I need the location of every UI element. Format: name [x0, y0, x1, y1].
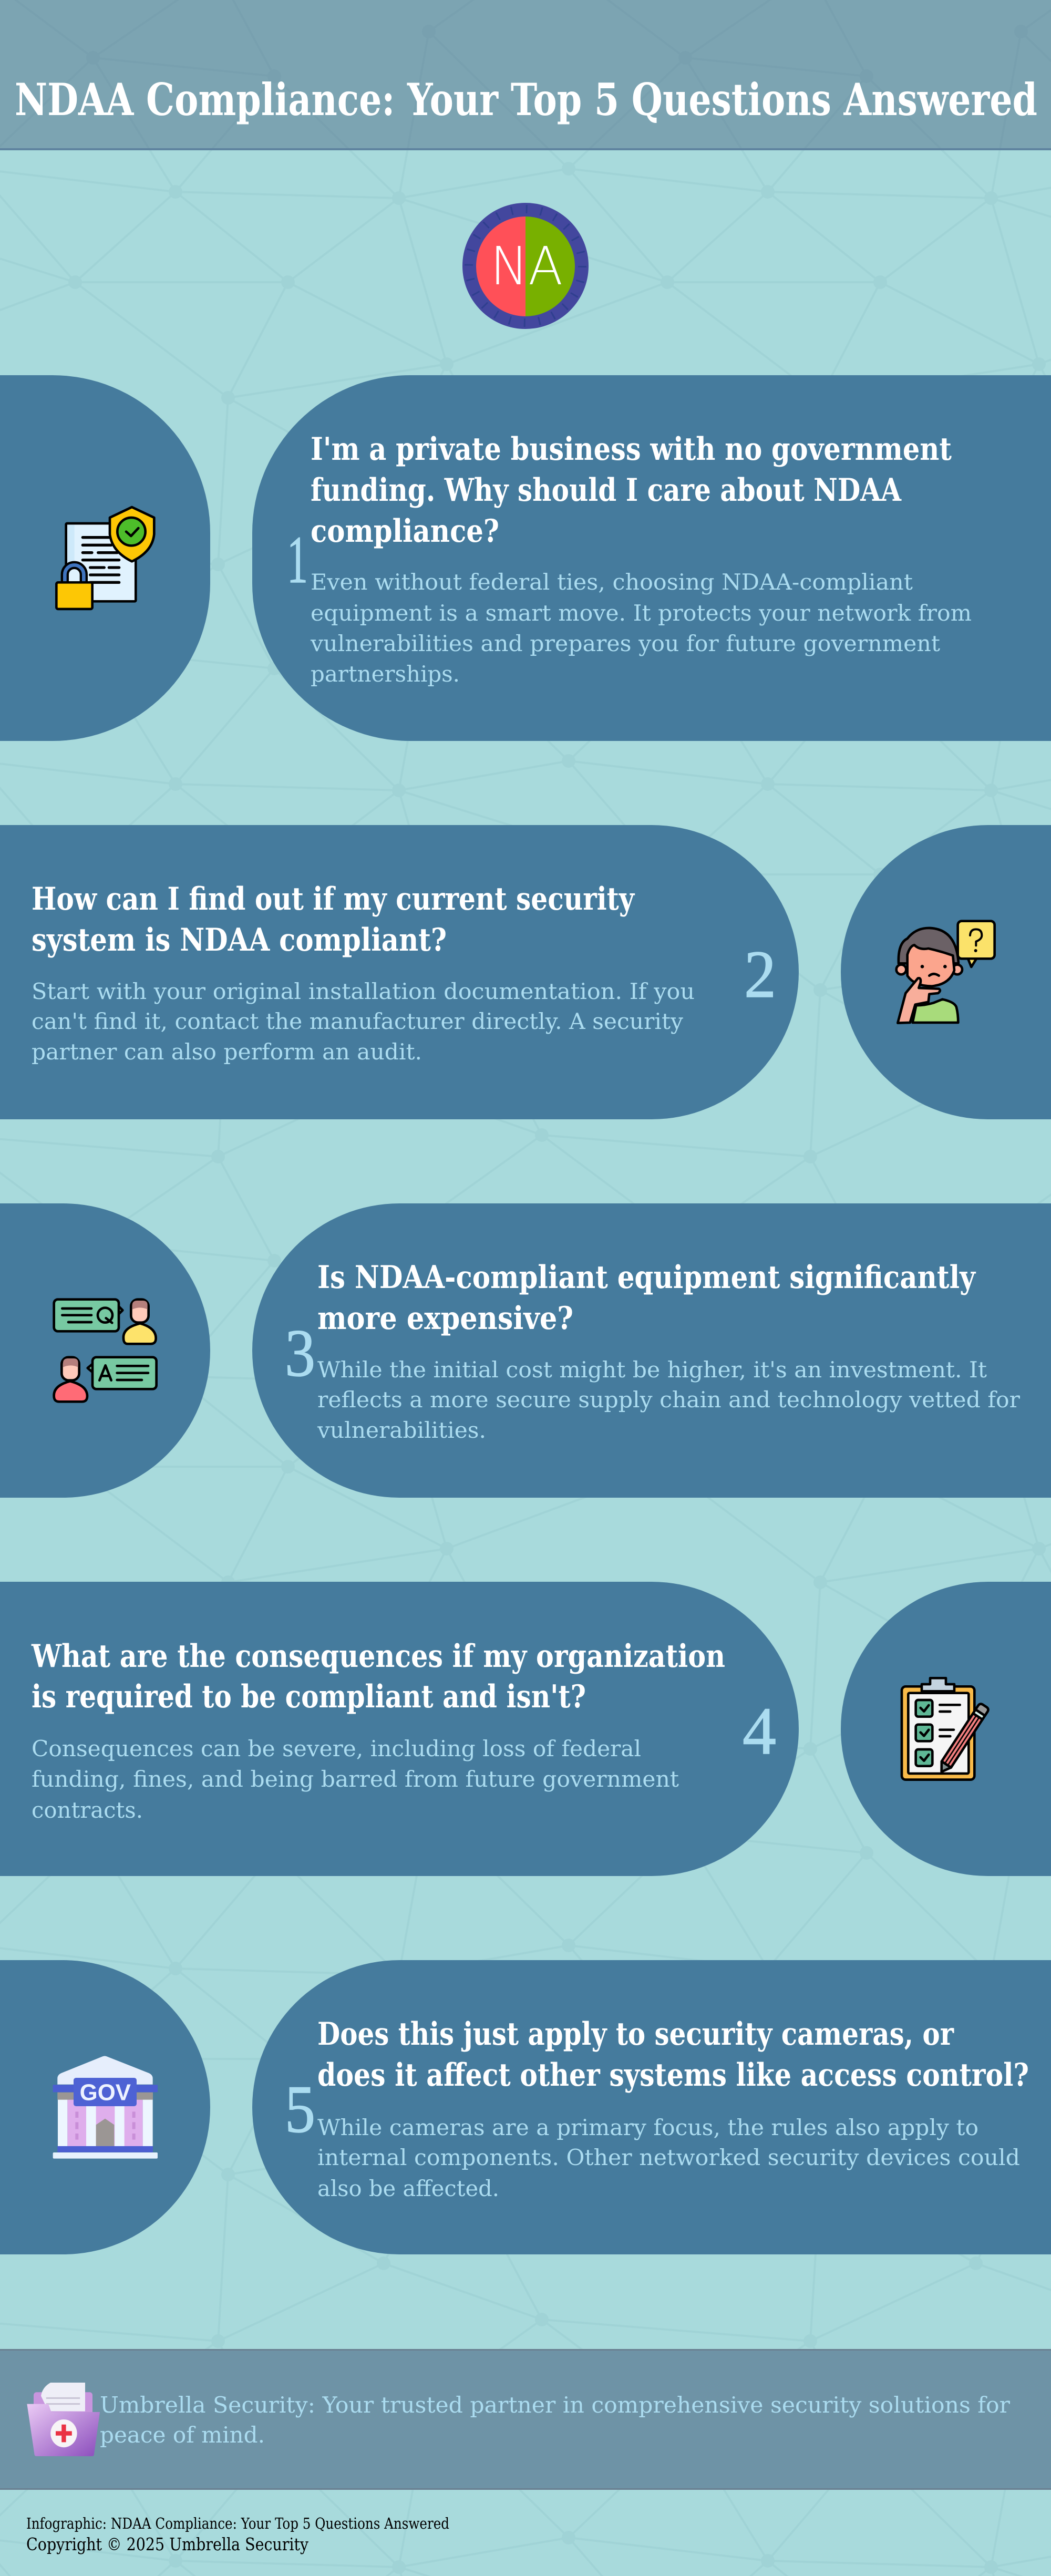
header band: [0, 0, 1051, 150]
answer 2: can't find it, contact the manufacturer directly. A security: [32, 1008, 683, 1034]
card 4: [0, 1582, 799, 1876]
question 3 heading: more expensive?: [317, 1300, 573, 1337]
number 4: 4: [743, 1694, 776, 1768]
card 5: [252, 1960, 1051, 2254]
icon panel 2: [841, 825, 1051, 1119]
number 5: 5: [285, 2072, 315, 2147]
logo: NA badge: [462, 203, 589, 329]
answer 4: contracts.: [32, 1797, 143, 1823]
credits: Copyright © 2025 Umbrella Security: [26, 2534, 308, 2554]
answer 5: [317, 2115, 1020, 2201]
card 2: [0, 825, 799, 1119]
question 4 heading: What are the consequences if my organization: [31, 1638, 725, 1675]
question 5 row: [0, 1960, 1051, 2254]
answer 2: [32, 978, 695, 1065]
icon: government building: [53, 2056, 158, 2159]
answer 4: Consequences can be severe, including loss of federal: [32, 1736, 641, 1761]
question 1 heading: compliance?: [311, 513, 499, 550]
answer 1: Even without federal ties, choosing NDAA-compliant: [311, 569, 913, 595]
footer band: [0, 2349, 1051, 2490]
answer 1: vulnerabilities and prepares you for future government: [310, 631, 940, 656]
answer 5: also be affected.: [317, 2176, 499, 2201]
icon: thinking person with question bubble: [897, 921, 995, 1023]
answer 3: While the initial cost might be higher, it's an investment. It: [317, 1357, 987, 1383]
question 4 row: [0, 1582, 1051, 1876]
question 1 heading: [311, 431, 952, 550]
icon: document with shield and padlock: [56, 507, 154, 609]
footer message: Umbrella Security: Your trusted partner in comprehensive security solutions for: [100, 2392, 1011, 2418]
question 5 heading: [317, 2016, 1029, 2094]
question 1 row: [0, 375, 1051, 741]
answer 2: partner can also perform an audit.: [32, 1039, 422, 1065]
answer 3: reflects a more secure supply chain and technology vetted for: [317, 1387, 1021, 1413]
question 2 row: [0, 825, 1051, 1119]
answer 1: partnerships.: [311, 661, 460, 687]
footer message: [100, 2392, 1011, 2448]
answer 4: [32, 1736, 679, 1823]
question 1 heading: funding. Why should I care about NDAA: [311, 472, 902, 509]
question 3 row: [0, 1203, 1051, 1498]
question 4 heading: [31, 1638, 725, 1715]
icon: government building: GOV: [80, 2080, 131, 2106]
icon panel 5: [0, 1960, 210, 2254]
question 1 heading: I'm a private business with no government: [311, 431, 952, 468]
answer 3: vulnerabilities.: [317, 1417, 486, 1443]
icon: question and answer people: [54, 1300, 157, 1402]
icon panel 3: [0, 1203, 210, 1498]
icon: medical folder: [27, 2383, 100, 2456]
icon panel 1: [0, 375, 210, 741]
question 2 heading: How can I find out if my current security: [32, 881, 635, 918]
answer 4: funding, fines, and being barred from future government: [32, 1766, 679, 1792]
question 3 heading: [317, 1259, 976, 1337]
question 2 heading: [32, 881, 635, 959]
answer 5: While cameras are a primary focus, the rules also apply to: [317, 2115, 978, 2140]
credits: Infographic: NDAA Compliance: Your Top 5 Questions Answered: [26, 2515, 449, 2532]
answer 1: [310, 569, 972, 687]
footer message: peace of mind.: [100, 2422, 265, 2448]
answer 2: Start with your original installation documentation. If you: [32, 978, 695, 1004]
card 1: [252, 375, 1051, 741]
logo letters: NA: [490, 235, 563, 297]
number 1: 1: [287, 522, 308, 597]
credits: [26, 2515, 449, 2554]
icon panel 4: [841, 1582, 1051, 1876]
number 3: 3: [285, 1316, 315, 1390]
question 2 heading: system is NDAA compliant?: [32, 922, 447, 959]
icon: clipboard checklist and pencil: [902, 1678, 990, 1780]
answer 1: equipment is a smart move. It protects your network from: [311, 600, 972, 626]
number 2: 2: [744, 937, 776, 1012]
question 4 heading: is required to be compliant and isn't?: [32, 1678, 586, 1715]
answer 3: [317, 1357, 1021, 1443]
answer 5: internal components. Other networked security devices could: [317, 2145, 1020, 2170]
card 3: [252, 1203, 1051, 1498]
